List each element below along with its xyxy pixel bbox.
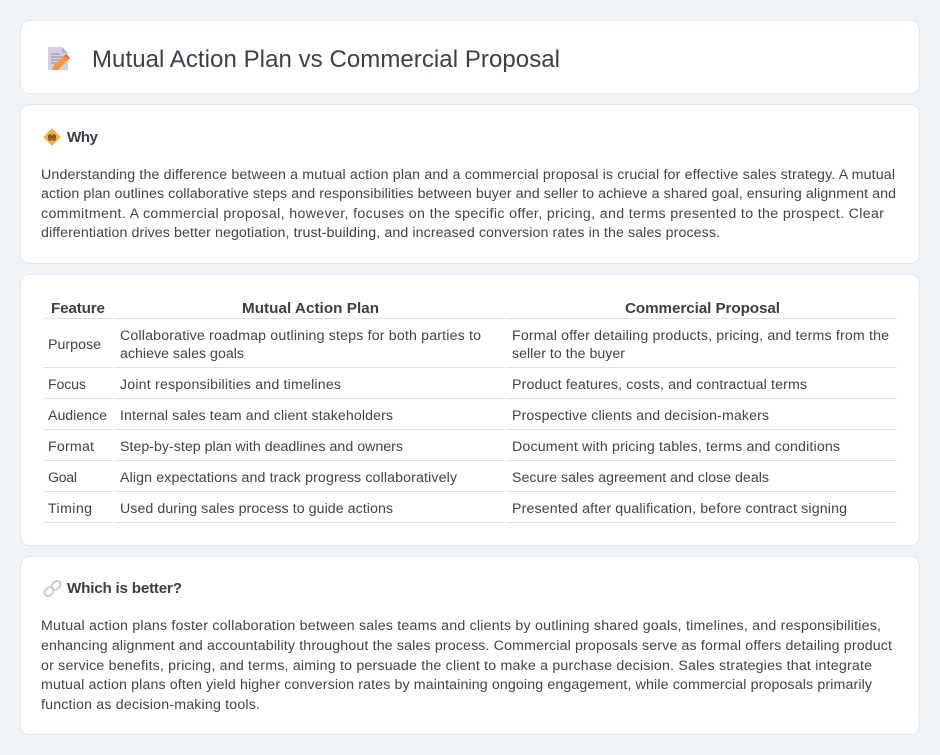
heading: why: Why: [67, 129, 99, 146]
row: audience: [43, 408, 897, 430]
text block: which is better paragraph: mutual action plans often yield higher conversion rates by maintaining ongoing engagement, while commercial proposals primarily: [41, 677, 873, 693]
text block: which is better paragraph: Mutual action plans foster collaboration between sales teams and clients by outlining shared goals, timelines, and responsibilities,: [41, 618, 881, 634]
row: timing: Used during sales process to guide actions: [120, 501, 393, 517]
row: format: [43, 439, 897, 461]
text block: which is better paragraph: [41, 618, 892, 713]
row: focus: Product features, costs, and contractual terms: [512, 377, 807, 393]
text block: which is better paragraph: function as decision-making tools.: [41, 697, 260, 713]
row: timing: Presented after qualification, before contract signing: [512, 501, 847, 517]
text block: why paragraph: commitment. A commercial proposal, however, focuses on the specific offer, pricing, and terms presented to the prospect. Clear: [41, 206, 884, 222]
row: format: Format: [48, 439, 94, 455]
row: purpose: Purpose: [48, 337, 101, 353]
row: purpose: Formal offer detailing products, pricing, and terms from the: [512, 328, 889, 344]
row: audience: Prospective clients and decision-makers: [512, 408, 769, 424]
text block: why paragraph: [41, 167, 896, 241]
row: focus: [43, 377, 897, 399]
icon: construction diamond: [44, 129, 60, 145]
panel: why: [20, 104, 920, 264]
row: purpose: achieve sales goals: [120, 346, 244, 362]
row: goal: Goal: [48, 470, 77, 486]
row: focus: Focus: [48, 377, 86, 393]
heading: which is better: Which is better?: [67, 580, 182, 597]
row: format: Step-by-step plan with deadlines and owners: [120, 439, 403, 455]
row: purpose: [43, 328, 897, 368]
icon: link: [43, 579, 62, 598]
row: purpose: Collaborative roadmap outlining steps for both parties to: [120, 328, 481, 344]
text block: why paragraph: action plan outlines collaborative steps and responsibilities between buyer and seller to achieve a shared goal, ensuring alignment and: [41, 186, 896, 202]
panel: which is better: [20, 556, 920, 734]
table header: Feature: [51, 300, 105, 317]
text block: why paragraph: differentiation drives better negotiation, trust-building, and increased conversion rates in the sales process.: [41, 225, 720, 241]
row: audience: Internal sales team and client stakeholders: [120, 408, 393, 424]
text block: which is better paragraph: or service benefits, pricing, and terms, aiming to persuade the client to make a purchase decision. Sales strategies that integrate: [41, 658, 872, 674]
text block: which is better paragraph: enhancing alignment and accountability throughout the sales process. Commercial proposals serve as formal offers detailing product: [41, 638, 892, 654]
row: format: Document with pricing tables, terms and conditions: [512, 439, 840, 455]
row: focus: Joint responsibilities and timelines: [120, 377, 341, 393]
row: goal: [43, 470, 897, 492]
table header: Commercial Proposal: [625, 300, 780, 317]
table header: Mutual Action Plan: [242, 300, 379, 317]
row: goal: Align expectations and track progress collaboratively: [120, 470, 458, 486]
row: timing: [43, 501, 897, 523]
title: Mutual Action Plan vs Commercial Proposal: [92, 46, 560, 73]
row: purpose: seller to the buyer: [512, 346, 625, 362]
table header: [43, 300, 897, 319]
panel: header: [20, 20, 920, 94]
row: goal: Secure sales agreement and close deals: [512, 470, 769, 486]
panel: comparison table: [20, 274, 920, 546]
row: audience: Audience: [48, 408, 107, 424]
text block: why paragraph: Understanding the difference between a mutual action plan and a commercial proposal is crucial for effective sales strategy. A mutual: [41, 167, 895, 183]
icon: memo: [48, 47, 70, 70]
row: timing: Timing: [48, 501, 92, 517]
